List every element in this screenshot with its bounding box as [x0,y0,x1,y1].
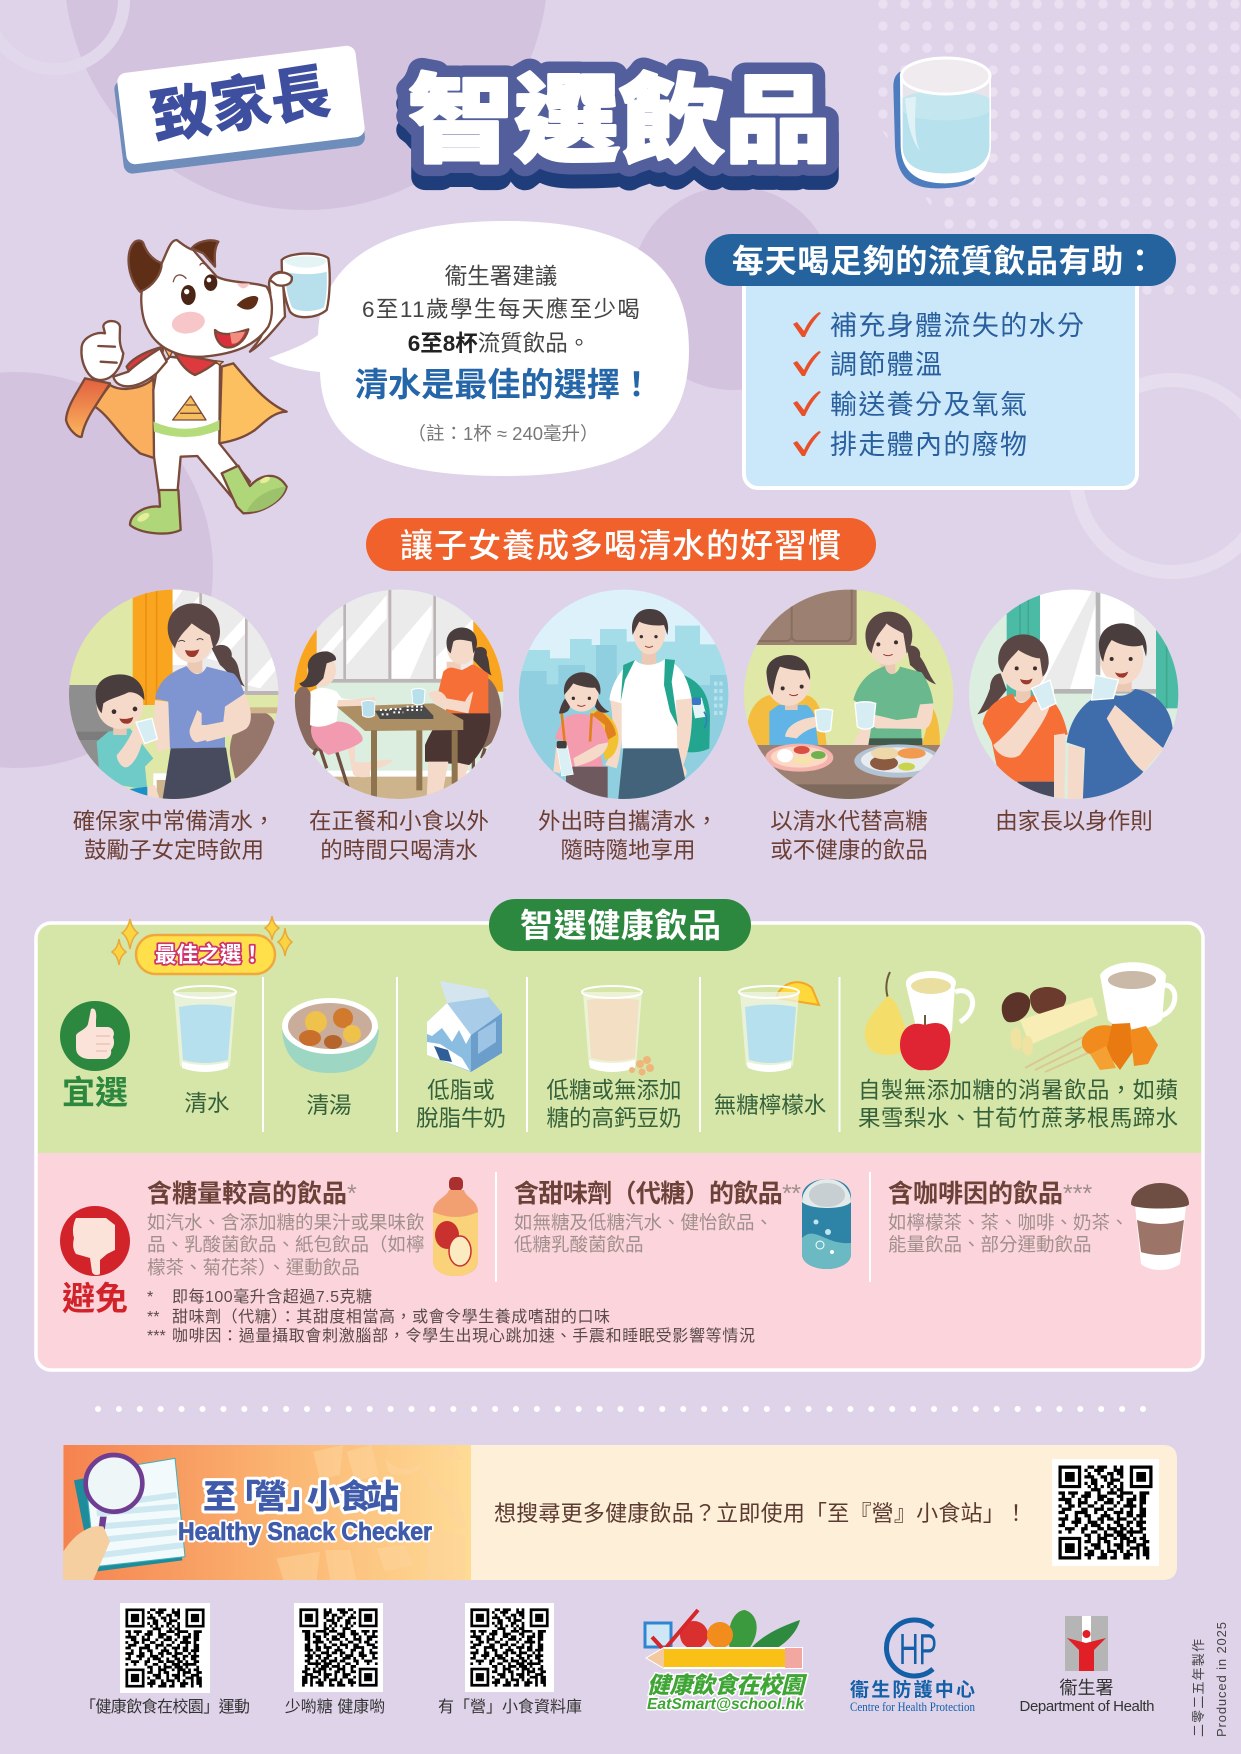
label: clear soup: 清湯 [306,1093,352,1118]
icon: water glass [174,986,236,1072]
banner title: 至「營」小食站 [203,1478,399,1515]
avoid: caffeinated drinks [888,1180,1129,1255]
benefits list: 調節體溫 [830,350,942,380]
heading: smart drinks: 智選健康飲品 [520,907,721,944]
benefits list [793,311,1084,460]
caption 2: 的時間只喝清水 [320,838,478,863]
QR: snack database: 有「營」小食資料庫 [438,1698,582,1716]
label: recommended: 宜選 [62,1074,128,1111]
footnotes [147,1287,755,1345]
icon: coffee cup [1131,1183,1189,1270]
caption 2: 在正餐和小食以外 [309,809,489,834]
panel: benefits of fluids [705,234,1176,488]
avoid: caffeinated drinks: 如檸檬茶、茶、咖啡、奶茶、 [888,1212,1129,1233]
caption 3: 隨時隨地享用 [560,838,696,863]
label: 致家長 [113,45,366,175]
label: soy milk: 糖的高鈣豆奶 [546,1106,682,1131]
icon: glass of water [893,58,991,188]
title: 智選飲品 [408,68,831,175]
icon: milk carton [427,981,502,1072]
production note: Produced in 2025 [1214,1622,1229,1737]
avoid: high sugar drinks: 品、乳酸菌飲品、紙包飲品（如檸 [147,1234,425,1255]
caption 4 [770,809,928,863]
QR: less sugar [285,1603,385,1716]
badge: best choice [112,916,292,974]
panel heading: 每天喝足夠的流質飲品有助： [732,243,1156,279]
logo: EatSmart@school.hk [645,1610,808,1713]
benefits list: 排走體內的廢物 [830,430,1027,460]
logo: Centre for Health Protection: HP [899,1625,937,1674]
background [0,0,1241,768]
icon: soda can [802,1179,851,1269]
title: 智選飲品 [408,68,831,175]
scene 3: carrying water outdoors [519,590,728,799]
caption 4: 以清水代替高糖 [770,809,928,834]
avoid: sweetened drinks: 如無糖及低糖汽水、健怡飲品、 [514,1212,773,1233]
avoid: high sugar drinks: 如汽水、含添加糖的果汁或果味飲 [147,1212,425,1233]
production note: 二零二五年製作 [1191,1639,1206,1737]
QR: EatSmart campaign [80,1603,250,1716]
label: low-fat milk [416,1078,506,1131]
benefits list: 補充身體流失的水分 [830,311,1084,341]
icon: juice bottle [433,1177,478,1276]
avoid: sweetened drinks: 含甜味劑（代糖）的飲品** [514,1180,801,1208]
avoid: sweetened drinks: 低糖乳酸菌飲品 [514,1234,644,1255]
icon: thumbs up [60,1001,130,1071]
label: lemon water: 無糖檸檬水 [714,1093,826,1118]
logo: EatSmart@school.hk: EatSmart@school.hk [647,1696,805,1713]
caption 1: 鼓勵子女定時飲用 [84,838,264,863]
label: avoid: 避免 [62,1280,128,1317]
caption 1 [73,809,275,863]
icon: home-made fruit drinks [865,962,1175,1072]
caption 5: 由家長以身作則 [995,809,1153,834]
QR: less sugar: 少喲糖 健康喲 [285,1698,385,1716]
label: water: 清水 [184,1091,230,1116]
scene 4: water with meals [740,585,960,805]
icon: thumbs down [60,1206,130,1276]
heading: habits [366,518,876,571]
speech bubble: （註：1杯 ≈ 240毫升） [407,423,599,444]
avoid: sweetened drinks [514,1180,801,1255]
logo: Department of Health: Department of Health [1020,1698,1154,1715]
logo: Centre for Health Protection [850,1620,975,1714]
speech bubble: 清水是最佳的選擇！ [355,366,653,403]
logo: Department of Health: 衞生署 [1060,1678,1114,1698]
avoid: high sugar drinks: 含糖量較高的飲品* [147,1180,357,1208]
banner title: Healthy Snack Checker [178,1518,432,1546]
icon: clear soup [282,998,379,1073]
icon: lemon water [739,982,819,1072]
banner artwork [63,1445,471,1580]
label: home-made drinks: 自製無添加糖的消暑飲品，如蘋 [858,1078,1178,1103]
speech bubble [269,221,689,476]
footnotes: ** [147,1309,159,1326]
panel: smart drink choices [35,922,1204,1371]
footnotes: *** [147,1328,166,1345]
caption 1: 確保家中常備清水， [73,809,275,834]
QR code [1052,1459,1159,1566]
logo: Centre for Health Protection: Centre for Health Protection [850,1699,975,1714]
logo: Department of Health [1020,1616,1154,1715]
badge: best choice: 最佳之選！ [155,942,263,967]
banner message: 想搜尋更多健康飲品？立即使用「至『營』小食站」！ [494,1501,1027,1526]
logo: Centre for Health Protection: 衞生防護中心 [850,1678,975,1701]
banner title: 至「營」小食站 [203,1478,399,1515]
caption 2 [309,809,489,863]
label: home-made drinks: 果雪梨水、甘荀竹蔗茅根馬蹄水 [858,1106,1178,1131]
icon: soy milk [582,986,654,1076]
heading: smart drinks [489,899,751,951]
footnotes: * [147,1289,153,1306]
label: soy milk [546,1078,682,1131]
avoid: caffeinated drinks: 含咖啡因的飲品*** [888,1180,1092,1208]
footnotes: 咖啡因：過量攝取會刺激腦部，令學生出現心跳加速、手震和睡眠受影響等情況 [172,1326,755,1345]
dividers [263,977,840,1132]
mascot: dog [66,240,330,534]
banner title: Healthy Snack Checker [178,1518,432,1546]
heading: habits: 讓子女養成多喝清水的好習慣 [400,527,841,564]
speech bubble: 6至11歲學生每天應至少喝 [362,297,640,322]
label: low-fat milk: 低脂或 [427,1078,495,1103]
label: 致家長: 致家長 [147,57,335,152]
avoid: high sugar drinks [147,1180,425,1278]
caption 3 [538,809,718,863]
QR: snack database [438,1603,582,1716]
label: home-made drinks [858,1078,1178,1131]
label: soy milk: 低糖或無添加 [546,1078,682,1103]
benefits list: 輸送養分及氧氣 [830,390,1027,420]
avoid: high sugar drinks: 檬茶、菊花茶）、運動飲品 [147,1257,360,1278]
caption 3: 外出時自攜清水， [538,809,718,834]
caption 4: 或不健康的飲品 [770,838,928,863]
speech bubble: 6至8杯流質飲品。 [408,331,590,356]
speech bubble: 衞生署建議 [445,264,557,289]
panel heading [705,234,1176,286]
footnotes: 即每100毫升含超過7.5克糖 [172,1287,372,1306]
scene 2: drinking water between meals [290,585,510,805]
avoid: caffeinated drinks: 能量飲品、部分運動飲品 [888,1234,1092,1255]
scene 1: parent and child at home [69,590,278,799]
production note [1191,1622,1229,1737]
divider [496,1172,870,1282]
footnotes: 甜味劑（代糖）：其甜度相當高，或會令學生養成嗜甜的口味 [172,1308,610,1326]
title: 智選飲品 [408,82,831,189]
banner title [178,1478,432,1546]
panel: Healthy Snack Checker banner [63,1445,1177,1580]
label: low-fat milk: 脫脂牛奶 [416,1106,506,1131]
QR: EatSmart campaign: 「健康飲食在校園」運動 [80,1698,250,1716]
scene 5: parents lead by example [963,585,1183,805]
logo: EatSmart@school.hk: 健康飲食在校園 [647,1672,808,1698]
